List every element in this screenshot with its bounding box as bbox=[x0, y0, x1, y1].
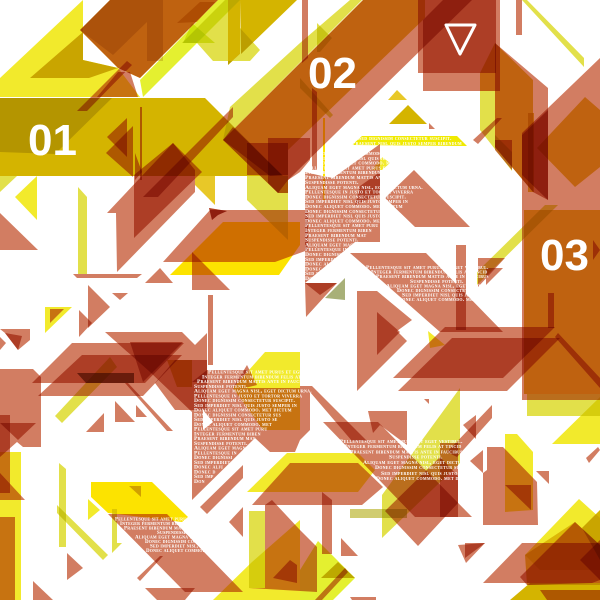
text block: lower centre: Sed imperdiet nisl quis justo se bbox=[381, 471, 465, 477]
panel: top-left arrows bbox=[0, 0, 297, 111]
text block: upper arrow: Praesent bibendum mattis ante in fa bbox=[305, 175, 401, 181]
icon: triangle bbox=[446, 25, 475, 54]
number: 03: 03 bbox=[540, 231, 589, 280]
text block: bottom parallelogram: Donec dignissim cons bbox=[145, 540, 200, 545]
text block: lower arrow: Sed imperdiet nisl quis justo se bbox=[194, 417, 278, 423]
panel: text arrow upper bbox=[305, 144, 560, 391]
panel: icon tile bbox=[418, 0, 500, 91]
panel: banner 03 bbox=[477, 205, 600, 463]
text block: yellow bar lines: Praesent nisl quis justo semper bibendum bbox=[352, 141, 462, 147]
text block: centre right: Integer fermentum bibendum felis at tincid bbox=[371, 270, 488, 276]
text block: upper arrow: Suspendisse potenti. bbox=[305, 180, 359, 186]
text block: lower arrow: Suspendisse potenti. bbox=[194, 441, 248, 447]
text block: bottom parallelogram: Sed imperdiet nisl, quis bbox=[150, 544, 211, 550]
panel: text arrow lower bbox=[192, 352, 300, 537]
text block: centre right: Sed imperdiet nisl quis justo bbox=[402, 293, 479, 299]
number: 02: 02 bbox=[308, 49, 357, 98]
number: 01: 01 bbox=[28, 116, 77, 165]
text block: lower arrow: Donec dignissi bbox=[194, 455, 233, 461]
text block: upper arrow: Aliquam eget magna nisl, eget dictum urna. bbox=[305, 185, 423, 191]
text block: upper arrow: Donec dignissi bbox=[305, 252, 344, 258]
panel: middle left hull bbox=[32, 295, 213, 432]
text block: upper arrow bbox=[305, 151, 429, 282]
text block: lower arrow: Donec aliu bbox=[194, 465, 224, 471]
text block: centre right: Pellentesque sit amet purus et eget vestibul. bbox=[366, 265, 489, 271]
text block: bottom parallelogram: Integer fermentum bibendum bbox=[120, 522, 195, 527]
text block: lower arrow: Aliquam eget magn bbox=[194, 446, 246, 452]
text block: upper arrow: Donec aliquet commodo amet dictum con bbox=[318, 151, 429, 157]
text block: lower arrow: Pellentesque in bbox=[194, 450, 237, 456]
text block: centre right: Donec dignissim consectetur sus bbox=[397, 288, 485, 294]
panel: house shape bbox=[470, 434, 549, 525]
text block: lower arrow: Aliquam eget magna nisl, eget dictum urna. bbox=[194, 388, 312, 394]
text block: lower centre: Suspendisse potenti. bbox=[389, 454, 443, 460]
text block: upper arrow: Praesent bibendum mat bbox=[305, 233, 366, 239]
text block: lower arrow: Donec aliquet commodo. met dictum bbox=[194, 408, 292, 414]
text block: upper arrow: Pellentesque sit amet puru bbox=[305, 223, 378, 229]
text block: lower arrow: Pellentesque sit amet purus et eget bbox=[208, 370, 305, 376]
text block: bottom parallelogram: Donec aliquet commodo. met bbox=[146, 549, 222, 554]
text block: lower arrow: Sed imperdiet bbox=[194, 460, 231, 466]
panel: centre triangles and bar bbox=[352, 90, 470, 227]
panel: bottom right cluster bbox=[483, 499, 600, 600]
text block: yellow bar lines bbox=[352, 136, 462, 147]
text block: upper arrow: Donec aliquet commodo. met dictum bbox=[318, 161, 416, 167]
text block: bottom parallelogram bbox=[115, 518, 222, 554]
text block: upper arrow: Sed imp bbox=[305, 271, 325, 277]
text block: upper arrow: Sed imperdiet nisl quis justo se bbox=[305, 214, 389, 220]
text block: lower centre: Donec aliquet commodo. met dictu bbox=[376, 476, 470, 482]
text block: centre right: Donec aliquet commodo. met bbox=[398, 297, 476, 303]
text block: lower arrow: Suspendisse potenti. bbox=[194, 384, 248, 390]
text block: upper arrow: Integer fermentum bibendum felis at bbox=[305, 170, 404, 176]
text block: lower arrow: Donec dignissim consectetur suscipit. bbox=[194, 398, 295, 404]
text block: lower arrow: Pellentesque sit amet puru bbox=[194, 427, 267, 433]
text block: centre right: Aliquam eget magna nisl, eget dictum bbox=[386, 283, 488, 289]
text block: upper arrow: Suspendisse potenti. bbox=[305, 238, 359, 244]
text block: centre right bbox=[366, 265, 489, 303]
panel: left edge bbox=[0, 369, 108, 600]
text block: upper arrow: Donec aliquet commodo. met bbox=[305, 218, 383, 224]
text block: lower centre: Aliquam eget magna nisl, eget dictum u bbox=[363, 460, 470, 466]
panel: bottom centre cluster bbox=[213, 500, 376, 600]
text block: upper arrow: Donec dignissim consectetur suscipit. bbox=[305, 194, 406, 200]
text block: lower centre: Integer fermentum bibendum felis at tincid bbox=[345, 444, 462, 450]
text block: bottom parallelogram: Suspendisse bbox=[157, 531, 187, 536]
panel: banner 01 bbox=[0, 98, 283, 272]
text block: lower arrow: Pellentesque in justo et tortor viverra bbox=[194, 393, 302, 399]
text block: lower centre: Donec dignissim consectetur su bbox=[375, 465, 460, 471]
text block: upper arrow: Donec aliquet commodo. met dictum bbox=[305, 204, 403, 210]
text block: upper arrow: Sed imperdiet nisl quis justo semper bbox=[318, 156, 414, 162]
text block: lower arrow: Donec d bbox=[194, 469, 216, 475]
text block: lower arrow: Donec aliquet commodo. met bbox=[194, 422, 272, 428]
text block: lower arrow: Integer fermentum bibendum felis at tincid bbox=[202, 374, 318, 380]
panel: bottom yellow block bbox=[33, 482, 243, 600]
text block: upper arrow: Donec dignissim consectetur sus bbox=[305, 209, 393, 215]
text block: lower arrow bbox=[194, 370, 318, 485]
text block: yellow bar lines: Sed dignissim consectetur suscipit. bbox=[358, 136, 452, 142]
text block: lower arrow: Praesent bibendum mat bbox=[194, 436, 255, 442]
text block: upper arrow: Pellentesque sit amet purus et eget purus bbox=[305, 165, 419, 171]
text block: lower arrow: Donec dignissim consectetur sus bbox=[194, 412, 282, 418]
panel: banner 02 bbox=[223, 0, 472, 240]
text block: lower centre: Praesent bibendum mattis ante in faucibus bbox=[350, 450, 463, 456]
text block: centre right: Suspendisse potenti. bbox=[410, 279, 464, 285]
panel: lower middle arrows bbox=[247, 386, 492, 563]
panel: centre left hexagon bbox=[0, 176, 308, 350]
text block: upper arrow: Donec aliu bbox=[305, 262, 334, 268]
text block: lower arrow: Sed imperdiet nisl quis justo semper in bbox=[194, 403, 297, 409]
text block: lower arrow: Sed imp bbox=[194, 474, 214, 480]
text block: lower centre bbox=[340, 439, 470, 482]
text block: upper arrow: Sed imperdiet bbox=[305, 257, 342, 263]
text block: bottom parallelogram: Aliquam eget magna nisl, bbox=[135, 536, 202, 540]
text block: upper arrow: Donec d bbox=[305, 266, 327, 272]
text block: centre right: Praesent bibendum mattis ante in faucibus bbox=[376, 274, 489, 280]
text block: lower arrow: Don bbox=[194, 479, 205, 485]
text block: bottom parallelogram: Pellentesque sit amet purus et eget bbox=[115, 518, 209, 522]
text block: upper arrow: Pellentesque in bbox=[305, 247, 348, 253]
text block: upper arrow: Sed imperdiet nisl quis justo semper in bbox=[305, 199, 408, 205]
text block: lower arrow: Integer fermentum biben bbox=[194, 431, 261, 437]
text block: upper arrow: Don bbox=[305, 276, 316, 282]
text block: bottom parallelogram: Praesent bibendum mattis bbox=[124, 526, 191, 532]
panel: right arrows bbox=[473, 0, 600, 400]
text block: upper arrow: Integer fermentum biben bbox=[305, 228, 372, 234]
text block: upper arrow: Pellentesque in justo et tortor viverra bbox=[305, 190, 413, 196]
text block: lower centre: Pellentesque sit amet purus et eget vestibul. bbox=[340, 439, 463, 445]
text block: lower arrow: Praesent bibendum mattis ante in faucibus bbox=[197, 379, 310, 385]
text block: upper arrow: Aliquam eget magn bbox=[305, 242, 357, 248]
